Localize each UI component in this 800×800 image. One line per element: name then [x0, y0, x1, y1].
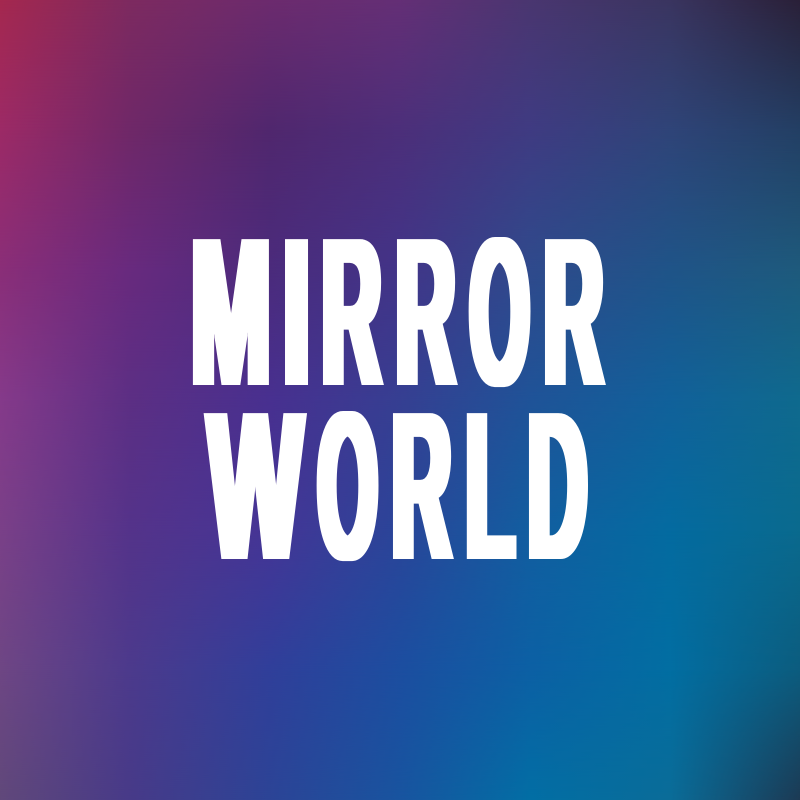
title line: WORLD: D [528, 366, 587, 604]
title line: MIRROR: R [322, 192, 381, 430]
title line: WORLD [204, 366, 588, 604]
title line: WORLD: O [318, 366, 378, 604]
title line: WORLD: R [392, 366, 451, 604]
title line: WORLD: L [466, 366, 515, 604]
title [191, 192, 606, 604]
title line: WORLD: W [208, 366, 303, 604]
title line: MIRROR: R [396, 192, 455, 430]
title line: MIRROR: O [470, 192, 530, 430]
title line: MIRROR: M [191, 192, 271, 430]
title line: MIRROR: R [544, 192, 603, 430]
title line: MIRROR: I [283, 192, 310, 430]
title line: MIRROR [191, 192, 606, 430]
